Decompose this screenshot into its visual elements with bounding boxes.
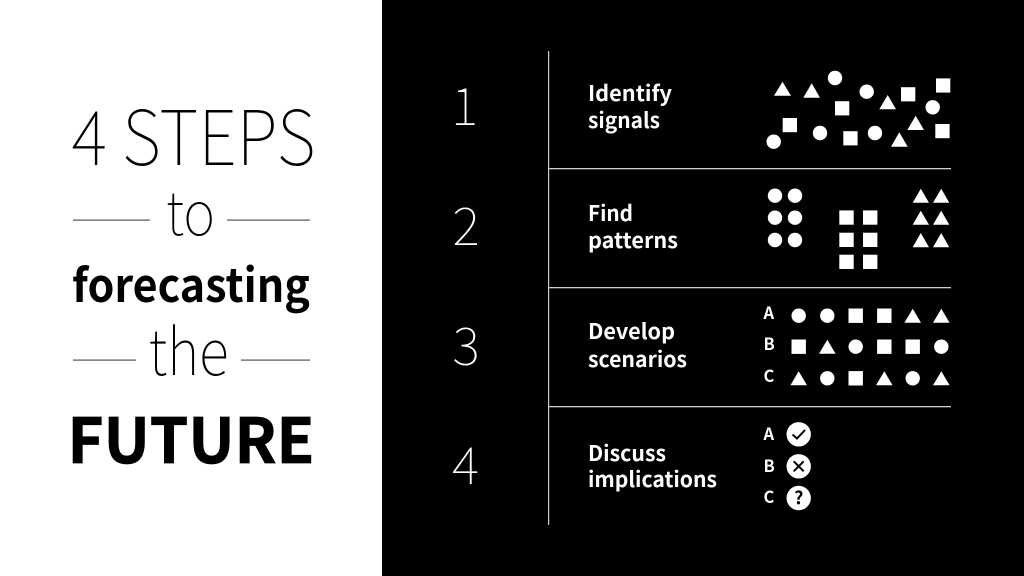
heading: FUTURE: FUTURE (68, 391, 314, 481)
label: Develop scenarios: Develop (588, 315, 675, 346)
label: Develop scenarios: scenarios (588, 343, 687, 374)
step 1 (451, 65, 950, 149)
icon: question mark (786, 484, 811, 510)
label: Discuss implications: Discuss (588, 437, 666, 468)
step 3 (452, 300, 950, 387)
heading: 4 STEPS: 4 STEPS (72, 77, 316, 187)
scenario letters (762, 300, 775, 387)
panel: title (0, 0, 382, 576)
icon: grouped patterns (768, 188, 949, 269)
scenario letters: C (764, 363, 774, 387)
implication letters: A (762, 421, 774, 445)
implication letters (762, 421, 775, 508)
number 3: 3 (452, 305, 480, 380)
implication letters: B (764, 453, 775, 477)
label: Discuss implications: implications (588, 463, 717, 494)
number 4: 4 (452, 424, 479, 499)
icon: question mark: ? (794, 484, 803, 510)
number 1: 1 (451, 65, 478, 140)
heading: to: to (166, 164, 215, 253)
label: Find patterns: Find (588, 197, 633, 228)
heading: the: the (148, 302, 228, 394)
icon: scattered signals (766, 71, 950, 149)
icon: check (786, 422, 811, 446)
number 2: 2 (452, 185, 480, 260)
scenario letters: B (764, 331, 775, 355)
step 2 (452, 185, 949, 269)
icon: scenario shape rows (790, 308, 950, 386)
scenario letters: A (762, 300, 774, 324)
label: Identify signals: signals (588, 104, 660, 135)
step 4 (452, 421, 811, 510)
icon: cross (786, 454, 811, 478)
label: Identify signals: Identify (588, 77, 673, 108)
heading: forecasting: forecasting (72, 250, 310, 316)
label: Find patterns: patterns (588, 224, 678, 255)
implication letters: C (764, 484, 774, 508)
